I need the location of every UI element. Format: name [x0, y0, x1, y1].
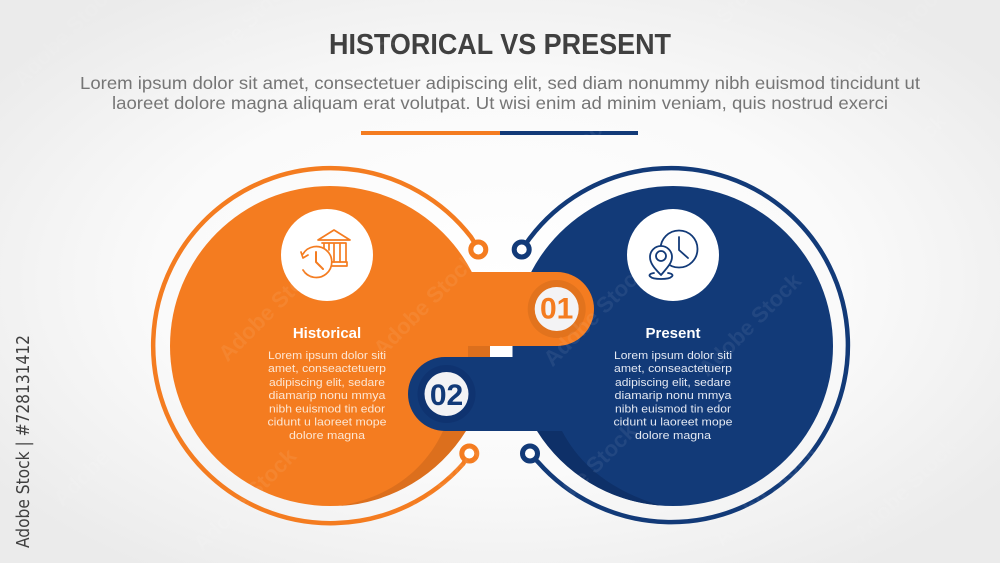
intro text: Lorem ipsum dolor sit amet, consectetuer adipiscing elit, sed diam nonummy nibh euismod tincidunt ut [80, 73, 920, 93]
watermark pattern: Adobe Stock [368, 248, 482, 361]
panel: present circle [513, 186, 833, 506]
text block: historical: Lorem ipsum dolor siti [268, 350, 386, 362]
text block: historical: cidunt u laoreet mope [268, 416, 386, 428]
blue outer ring with connectors [514, 168, 848, 522]
tab 01: 01 [540, 292, 573, 326]
text block: present: dolore magna [635, 430, 712, 442]
icon: museum with clock [281, 209, 373, 301]
tab 02 [408, 357, 545, 431]
watermark pattern: Adobe Stock [883, 248, 997, 361]
text block: present: cidunt u laoreet mope [614, 416, 732, 428]
crescent shadow [340, 431, 466, 506]
text block: historical: amet, conseactetuerp [268, 363, 386, 375]
watermark pattern: Adobe Stock [693, 268, 807, 381]
connector centre blocks [468, 345, 532, 358]
crescent shadow [537, 431, 660, 506]
text block: present: Present [645, 325, 701, 342]
text block: historical: dolore magna [289, 430, 366, 442]
watermark pattern: Adobe Stock [528, 418, 642, 531]
text block: present: diamarip nonu mmya [614, 390, 732, 402]
watermark pattern: Adobe Stock [503, 108, 617, 221]
text block: historical: nibh euismod tin edor [269, 404, 385, 416]
watermark pattern: Adobe Stock [708, 438, 822, 551]
watermark pattern: Adobe Stock [178, 108, 292, 221]
text block: historical: adipiscing elit, sedare [269, 377, 385, 389]
tab 02: 02 [430, 379, 463, 412]
text block: historical: diamarip nonu mmya [268, 390, 386, 402]
text block: present: nibh euismod tin edor [615, 404, 731, 416]
text block: historical: Historical [293, 325, 361, 342]
text block: present [614, 325, 732, 442]
text block: historical [268, 325, 386, 442]
watermark pattern: Adobe Stock [538, 258, 652, 371]
text block: present: adipiscing elit, sedare [615, 377, 731, 389]
text block: present: amet, conseactetuerp [614, 363, 732, 375]
panel: historical circle [170, 186, 490, 506]
orange outer ring with connectors [153, 168, 486, 523]
watermark pattern: Adobe Stock [848, 433, 962, 546]
intro text: laoreet dolore magna aliquam erat volutpat. Ut wisi enim ad minim veniam, quis nostrud exerci [112, 93, 888, 113]
intro text [80, 73, 920, 113]
watermark pattern: Adobe Stock [33, 258, 147, 371]
watermark pattern: Adobe Stock [213, 253, 327, 366]
watermark pattern: Adobe Stock [838, 108, 952, 221]
watermark pattern: Adobe Stock [23, 88, 137, 201]
title divider bar [361, 131, 638, 135]
title: HISTORICAL VS PRESENT [329, 29, 671, 61]
watermark pattern: Adobe Stock [188, 443, 302, 556]
watermark pattern: Adobe Stock [378, 438, 492, 551]
stock id label: Adobe Stock | #728131412 [14, 335, 34, 548]
watermark pattern: Adobe Stock [48, 398, 162, 511]
icon: clock with map pin [627, 209, 719, 301]
text block: present: Lorem ipsum dolor siti [614, 350, 732, 362]
tab 01 [460, 272, 594, 346]
